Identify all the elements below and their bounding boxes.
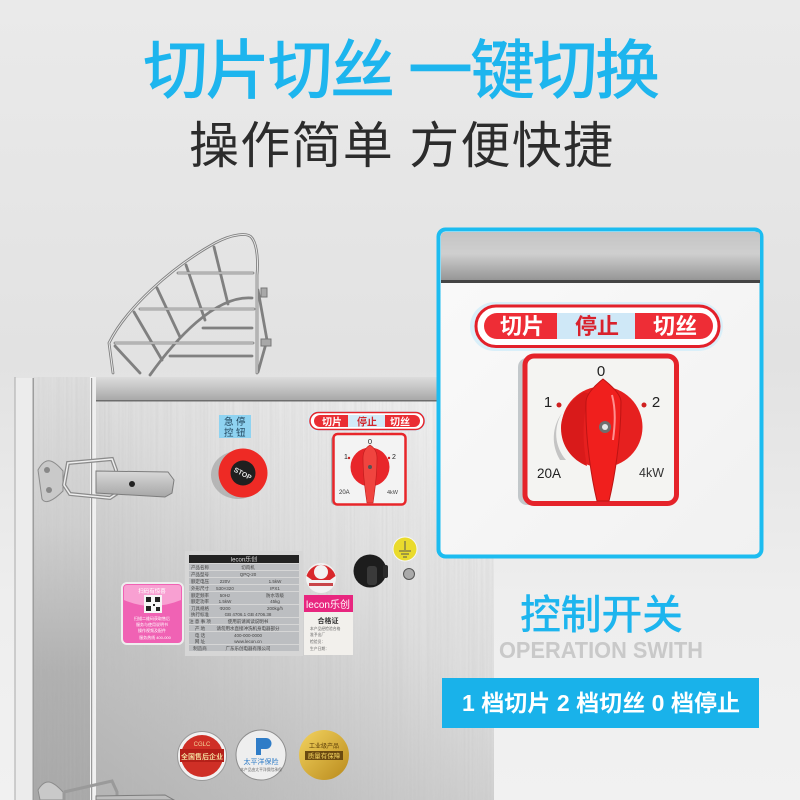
callout rotary switch: 4kW <box>639 466 664 480</box>
callout function label <box>470 302 723 351</box>
control panel face <box>96 400 494 800</box>
nameplate: 530×320 <box>216 586 234 591</box>
machine body <box>14 377 494 800</box>
nameplate: 广东乐创电器有限公司 <box>226 645 270 652</box>
nameplate: 制造商 <box>193 645 207 652</box>
small function label: 停止 <box>357 416 377 428</box>
mode legend bar: 1 档切片 2 档切丝 0 档停止 <box>462 690 740 716</box>
nameplate: 1.5kW <box>269 579 282 584</box>
callout top steel band <box>441 232 760 280</box>
title: 切片切丝 一键切换 <box>143 34 660 107</box>
nameplate: 执行标准 <box>191 611 209 618</box>
lecon warranty card <box>304 595 353 655</box>
door front <box>33 377 92 800</box>
badge: insurance: 太平洋保险 <box>244 757 278 766</box>
small function label <box>308 411 426 431</box>
nameplate: 外形尺寸 <box>191 585 209 592</box>
black power knob <box>354 554 388 588</box>
nameplate: 50Hz <box>220 593 231 598</box>
callout rotary switch: 1 <box>544 394 552 411</box>
door edge <box>15 378 33 800</box>
nameplate: 使用前请阅读说明书 <box>228 618 269 625</box>
nameplate: 额定功率 <box>191 598 209 605</box>
nameplate: 额定电压 <box>191 578 209 585</box>
nameplate: 产品名称 <box>191 564 209 571</box>
nameplate: 刀具规格 <box>191 605 209 612</box>
subtitle: 操作简单 方便快捷 <box>189 118 613 174</box>
mode legend bar <box>442 678 759 728</box>
emergency stop button: STOP <box>232 467 253 482</box>
small function label: 切丝 <box>390 416 410 428</box>
pink QR sticker: 操作视频及配件 <box>138 627 166 633</box>
badge: insurance <box>236 730 286 780</box>
small rotary switch: 4kW <box>387 490 399 496</box>
badge: gold: 工业级产品 <box>309 742 339 750</box>
lecon warranty card: 准予出厂 <box>310 632 325 637</box>
callout rotary switch: 20A <box>537 466 561 481</box>
lecon warranty card: 检验员： <box>310 639 325 644</box>
earth warning sticker <box>393 537 417 561</box>
emergency stop button <box>211 448 268 499</box>
lecon warranty card: lecon乐创 <box>306 598 350 611</box>
nameplate: lecon乐创 <box>231 556 257 564</box>
small rotary switch: 20A <box>339 490 350 496</box>
nameplate: 400-000-0000 <box>234 633 263 638</box>
pink QR sticker: 服务热线 400-000 <box>139 634 172 640</box>
nameplate: 注 意 事 项 <box>189 618 211 625</box>
nameplate: GB 4706.1 GB 4706.38 <box>225 612 272 617</box>
lecon warranty card: 生产日期： <box>310 646 329 651</box>
nameplate <box>185 551 303 656</box>
callout rotary switch: 0 <box>597 363 605 380</box>
english caption: OPERATION SWITH <box>499 637 703 663</box>
badge: insurance: 本产品由太平洋保险承保 <box>240 767 282 772</box>
nameplate: 220V <box>220 579 230 584</box>
small rotary switch <box>331 434 406 505</box>
nameplate: 请勿用水直接冲洗机身电器部分 <box>216 625 280 632</box>
pink QR sticker <box>122 583 183 644</box>
pink QR sticker: 服务与使用说明书 <box>136 621 168 627</box>
small rotary switch: 0 <box>368 437 372 446</box>
nameplate: 产 地 <box>195 625 206 632</box>
badge: red: CGLC <box>194 742 211 748</box>
pink QR sticker: 扫描二维码获取售后 <box>134 615 170 621</box>
heading: control switch: 控制开关 <box>520 592 683 638</box>
callout rotary switch: 2 <box>652 394 660 411</box>
callout function label: 停止 <box>575 314 619 339</box>
nameplate: 200kg/h <box>267 606 284 611</box>
nameplate: QPQ-20 <box>240 572 257 577</box>
nameplate: IPX1 <box>270 586 280 591</box>
callout panel: switch close-up <box>438 230 762 556</box>
door seam <box>90 377 96 800</box>
latch: lower <box>38 781 174 800</box>
badge: red <box>178 732 226 780</box>
nameplate: 电 话 <box>195 632 206 639</box>
small function label: 切片 <box>322 416 342 428</box>
nameplate: 产品型号 <box>191 571 209 578</box>
callout function label: 切丝 <box>653 314 697 339</box>
nameplate: 防水等级 <box>266 592 284 599</box>
pink QR sticker: 扫码有惊喜 <box>138 587 166 595</box>
emergency stop sign: 停 <box>236 416 246 428</box>
red round sticker <box>306 563 336 593</box>
nameplate: Φ200 <box>219 606 231 611</box>
callout function label: 切片 <box>500 314 544 339</box>
badge: red: 全国售后企业 <box>181 752 223 761</box>
brushed steel texture <box>33 377 494 800</box>
lecon warranty card: 合格证 <box>318 616 338 625</box>
small screw <box>404 568 414 580</box>
small rotary switch: 2 <box>392 454 396 461</box>
emergency stop sign <box>219 415 251 439</box>
callout rotary switch <box>518 356 676 505</box>
badge: gold <box>299 730 349 780</box>
badge: gold: 质量有保障 <box>308 751 341 760</box>
wire basket <box>109 235 271 375</box>
emergency stop sign: 钮 <box>236 427 246 439</box>
latch: upper <box>38 459 174 502</box>
small rotary switch: 1 <box>344 454 348 461</box>
nameplate: 1.5kW <box>219 599 232 604</box>
nameplate: 额定频率 <box>191 592 209 599</box>
nameplate: www.lecon.cn <box>234 639 262 644</box>
nameplate: 切肉机 <box>241 564 255 571</box>
lecon warranty card: 本产品经检验合格 <box>310 626 341 631</box>
top band <box>96 377 494 401</box>
nameplate: 网 址 <box>195 638 206 645</box>
emergency stop sign: 控 <box>224 427 234 439</box>
emergency stop sign: 急 <box>224 416 234 428</box>
nameplate: 45kg <box>270 599 280 604</box>
